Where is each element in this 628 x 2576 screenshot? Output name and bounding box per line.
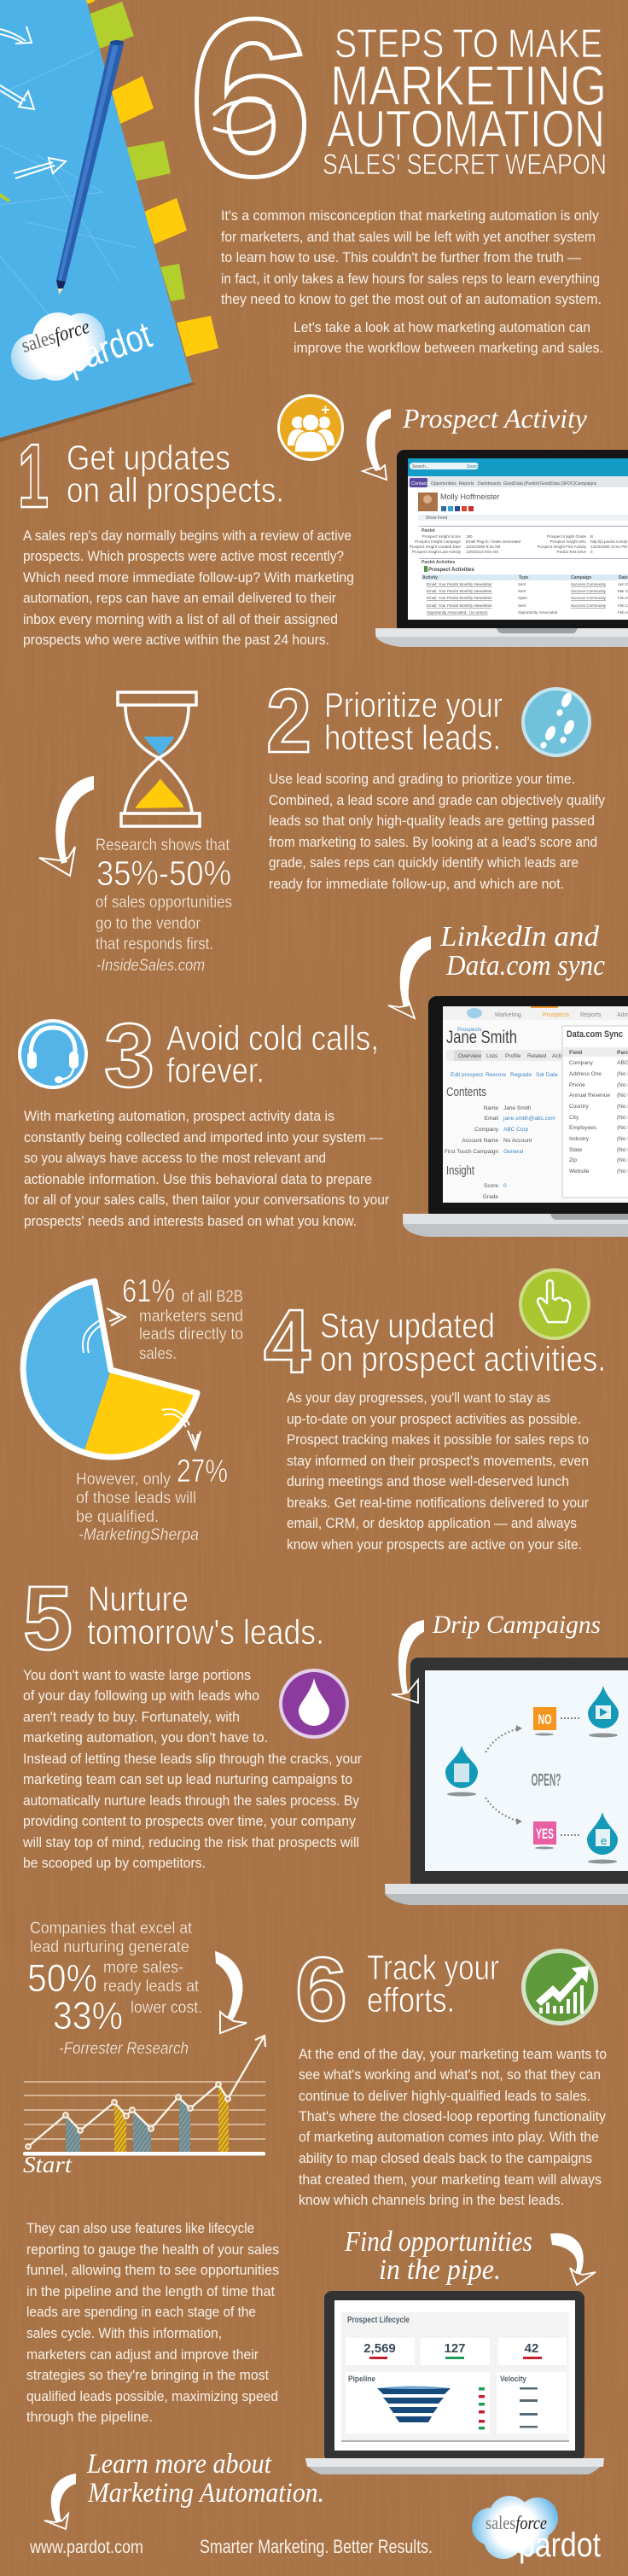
intro text: in fact, it only takes a few hours for sales reps to learn everything: [221, 271, 600, 287]
drip flow: NO: [538, 1711, 551, 1728]
step 5 text: aren't ready to buy. Fortunately, with: [23, 1710, 240, 1725]
lifecycle reporting text: through the pipeline.: [26, 2410, 153, 2425]
laptop 2: data.com sync screen: Overview: [458, 1053, 481, 1059]
laptop 1: prospect activity screen: Pardot: [422, 528, 435, 533]
lifecycle reporting text: funnel, allowing them to see opportunities: [26, 2263, 279, 2278]
research stat callout: that responds first.: [96, 935, 213, 953]
research stat callout: Research shows that: [96, 836, 230, 854]
laptop 4: prospect lifecycle dashboard: Prospect Lifecycle: [347, 2316, 410, 2325]
laptop 1: prospect activity screen: Email: Your Pardot Monthly Newsletter: [427, 603, 492, 608]
laptop 2: data.com sync screen: Website: [569, 1169, 590, 1174]
step 4 text: As your day progresses, you'll want to stay as: [287, 1390, 550, 1406]
27 percent callout: [76, 1454, 228, 1544]
step 1 text: [23, 528, 354, 648]
arrow to research stat: [39, 776, 94, 876]
handwritten label: find opportunities in the pipe: in the pipe.: [379, 2254, 501, 2286]
laptop 1: prospect activity screen: Campaigns: [575, 481, 597, 487]
laptop 2: data.com sync screen: ABC Corp: [503, 1127, 529, 1133]
laptop 1: prospect activity screen: Reports: [459, 481, 474, 487]
velocity list: Velocity: [500, 2375, 526, 2383]
handwritten label: find opportunities in the pipe: Find opportunities: [344, 2226, 532, 2258]
laptop 2: data.com sync screen: Industry: [569, 1136, 590, 1142]
lifecycle reporting text: [26, 2221, 279, 2425]
step 2 text: from marketing to sales. By looking at a lead's score and: [269, 835, 597, 850]
intro text: to learn how to use. This couldn't be further from the truth —: [221, 250, 581, 265]
step 6 text: that created them, your marketing team will always: [299, 2172, 602, 2188]
lifecycle reporting text: They can also use features like lifecycle: [26, 2221, 254, 2236]
step 3 text: prospects' needs and interests based on what you know.: [24, 1214, 357, 1229]
step 5 heading: tomorrow's leads.: [87, 1612, 324, 1652]
step 1 text: prospects who were active within the past 24 hours.: [23, 632, 329, 648]
step 1 text: A sales rep's day normally begins with a review of active: [23, 528, 352, 544]
laptop 2: data.com sync screen: City: [569, 1115, 579, 1121]
laptop 2: data.com sync screen: Field: [569, 1050, 582, 1056]
laptop 2: data.com sync screen: Contents: [446, 1085, 486, 1099]
laptop 1: prospect activity screen: Email: Your Pardot Monthly Newsletter: [427, 582, 492, 586]
step 2 heading: [324, 685, 503, 757]
intro text: [221, 208, 603, 356]
laptop 2: data.com sync screen: Activ: [552, 1053, 565, 1059]
lifecycle reporting text: marketers can adjust and improve their: [26, 2347, 259, 2363]
laptop 1: prospect activity screen: Campaign: [571, 575, 591, 580]
step 5 text: automatically nurture leads through the sales process. By: [23, 1793, 360, 1809]
arrow to laptop 1: [363, 409, 391, 480]
arrow to chart: [215, 1951, 247, 2033]
footer tagline: Smarter Marketing. Better Results.: [200, 2536, 433, 2557]
sticky tabs: [85, 0, 218, 357]
lead nurturing stat callout: -Forrester Research: [59, 2040, 189, 2058]
61 percent callout: [122, 1273, 243, 1363]
laptop 2: data.com sync screen: Profile: [505, 1053, 521, 1059]
laptop 1: prospect activity screen: Pardot Activities: [422, 560, 455, 565]
61 percent callout: leads directly to: [139, 1326, 243, 1343]
icon: droplet: [279, 1669, 349, 1739]
arrow to url: [44, 2474, 76, 2529]
step 4 heading: Stay updated: [320, 1306, 495, 1345]
step 1 numeral: 1: [18, 426, 49, 527]
laptop 1: prospect activity screen: 0: [590, 550, 593, 554]
footer logo: salesforce pardot: [472, 2496, 601, 2564]
icon: pointing hand: [519, 1268, 590, 1340]
laptop 1: prospect activity screen: 12/22/2009 12:01 PM: [590, 545, 627, 549]
61 percent callout: sales.: [139, 1345, 177, 1363]
27 percent callout: be qualified.: [76, 1508, 159, 1526]
step 4 text: stay informed on their prospect's movements, even: [287, 1454, 589, 1469]
laptop 2: data.com sync screen: [403, 996, 628, 1237]
step 1 heading: [67, 438, 284, 510]
27 percent callout: of those leads will: [76, 1489, 196, 1507]
laptop 1: prospect activity screen: GoodData (SFDC): [540, 481, 575, 487]
laptop 2: data.com sync screen: First Touch Campaign: [445, 1149, 498, 1155]
research stat callout: of sales opportunities: [96, 894, 232, 912]
research stat callout: -InsideSales.com: [96, 957, 205, 975]
step 1 text: Which need more immediate follow-up? With marketing: [23, 570, 354, 586]
handwritten label: prospect activity: Prospect Activity: [402, 403, 588, 434]
hatched bars: [66, 2084, 229, 2153]
step 1 heading: Get updates: [67, 438, 230, 477]
handwritten label: linkedin and data.com sync: [439, 921, 605, 982]
line chart: Start: [23, 2152, 73, 2177]
lifecycle stats: 42: [525, 2341, 538, 2356]
laptop 2: data.com sync screen: Jane Smith: [503, 1105, 532, 1111]
lifecycle reporting text: leads are spending in each stage of the: [26, 2305, 256, 2320]
step 6 text: know which channels bring in the best leads.: [299, 2193, 564, 2208]
blue notebook with tabs, pen and logo: [0, 0, 218, 442]
hourglass illustration: [118, 692, 200, 826]
step 3 text: for all of your sales calls, then tailor your conversations to your: [24, 1192, 389, 1208]
lead nurturing stat callout: ready leads at: [103, 1978, 200, 1996]
laptop 1: prospect activity screen: Success Community: [571, 603, 607, 608]
laptop 1: prospect activity screen: Date: [619, 575, 628, 580]
laptop 1: prospect activity screen: Search: [467, 464, 480, 469]
step 3 text: constantly being collected and imported into your system —: [24, 1130, 383, 1145]
pie chart: [22, 1281, 201, 1457]
laptop 1: prospect activity screen: Molly Hoffmeister: [440, 492, 499, 501]
step 1 heading: on all prospects.: [67, 470, 284, 510]
laptop 1: prospect activity screen: Prospect Insight Created Date: [410, 545, 461, 549]
61 percent callout: marketers send: [139, 1308, 243, 1326]
lifecycle reporting text: reporting to gauge the health of your sales: [26, 2242, 279, 2258]
laptop 1: prospect activity screen: Show Feed: [426, 516, 448, 521]
step 6 text: At the end of the day, your marketing team wants to: [299, 2047, 607, 2062]
handwritten call to action: Marketing Automation.: [87, 2478, 324, 2509]
laptop 1: prospect activity screen: Dashboards: [478, 481, 501, 487]
laptop 2: data.com sync screen: Prospects: [543, 1012, 570, 1018]
lifecycle stats: 127: [444, 2341, 466, 2356]
step 4 heading: [320, 1306, 606, 1378]
logo: salesforce pardot: pardot: [61, 314, 157, 382]
step 3 heading: forever.: [166, 1051, 265, 1090]
laptop 2: data.com sync screen: Prospects: [457, 1027, 483, 1033]
handwritten call to action: Learn more about: [86, 2449, 272, 2480]
laptop 2: data.com sync screen: 0: [503, 1183, 507, 1189]
laptop 2: data.com sync screen: No Account: [503, 1138, 532, 1144]
drip flow: e: [601, 1834, 607, 1847]
laptop 1: prospect activity screen: GoodData (Pardot): [503, 481, 540, 487]
step 3 heading: Avoid cold calls,: [166, 1018, 379, 1058]
step 6 heading: Track your: [367, 1948, 499, 1987]
intro text: they need to know to get the most out of an automation system.: [221, 292, 602, 307]
lifecycle stats: 2,569: [363, 2341, 396, 2356]
step 2 text: [269, 772, 606, 892]
lifecycle reporting text: sales cycle. With this information,: [26, 2326, 222, 2341]
pie arrows: [83, 1308, 201, 1449]
step 4 text: [287, 1390, 589, 1553]
laptop 2: data.com sync screen: State: [569, 1147, 583, 1153]
step 4 numeral: 4: [264, 1291, 311, 1392]
lifecycle reporting text: qualified leads possible, maximizing speed: [26, 2389, 278, 2404]
61 percent callout: 61%: [122, 1273, 175, 1309]
research stat callout: go to the vendor: [96, 915, 201, 933]
laptop 2: data.com sync screen: General: [503, 1149, 524, 1155]
laptop 1: prospect activity screen: Success Community: [571, 589, 607, 593]
laptop 1: prospect activity screen: Open: [518, 596, 528, 600]
laptop 1: prospect activity screen: [375, 450, 628, 647]
handwritten label: find opportunities in the pipe: [344, 2226, 532, 2286]
step 2 text: grade, sales reps can quickly identify which leads are: [269, 855, 579, 871]
lead nurturing stat callout: lead nurturing generate: [30, 1938, 189, 1956]
laptop 1: prospect activity screen: Type: [519, 575, 529, 580]
laptop 1: prospect activity screen: Success Community: [571, 582, 607, 586]
laptop 2: data.com sync screen: Related: [527, 1053, 547, 1059]
laptop 2: data.com sync screen: Company: [569, 1060, 594, 1066]
laptop 2: data.com sync screen: Rescore: [486, 1072, 507, 1078]
step 5 text: marketing team can set up lead nurturing campaigns to: [23, 1772, 352, 1787]
laptop 2: data.com sync screen: jane.smith@abc.com: [503, 1116, 555, 1122]
laptop 2: data.com sync screen: Edit prospect: [451, 1072, 483, 1078]
laptop 2: data.com sync screen: Sdr Data: [536, 1072, 558, 1078]
step 5 text: marketing automation, you don't have to.: [23, 1730, 268, 1746]
laptop 1: prospect activity screen: 180: [466, 534, 473, 539]
step 4 text: email, CRM, or desktop application — and always: [287, 1516, 577, 1531]
drip flow: OPEN?: [531, 1771, 561, 1790]
logo: salesforce pardot: salesforce: [19, 316, 92, 358]
laptop 1: prospect activity screen: Opportunity Associated - (no action): [427, 610, 488, 615]
laptop 2: data.com sync screen: Address One: [569, 1071, 602, 1077]
laptop 1: prospect activity screen: 1/25/2013 9:02 AM: [466, 550, 498, 554]
laptop 1: prospect activity screen: Activity: [422, 575, 438, 580]
lifecycle reporting text: in the pipeline and the length of time that: [26, 2284, 275, 2299]
step 1 text: inbox every morning with a list of all of their assigned: [23, 612, 338, 627]
step 6 heading: [367, 1948, 499, 2019]
notebook page: [0, 0, 192, 438]
icon: people: [277, 394, 344, 461]
lead nurturing stat callout: 33%: [53, 1994, 123, 2037]
laptop 1: prospect activity screen: Prospect Insight First Activity: [537, 545, 587, 549]
step 4 text: Prospect tracking makes it possible for sales reps to: [287, 1432, 589, 1448]
step 1 text: prospects. Which prospects were active most recently?: [23, 549, 344, 564]
step 5 text: You don't want to waste large portions: [23, 1668, 251, 1683]
laptop 1: prospect activity screen: 12/22/2009 9:26 AM: [466, 545, 501, 549]
step 5 text: Instead of letting these leads slip through the cracks, your: [23, 1751, 362, 1767]
laptop 2: data.com sync screen: Regrade: [510, 1072, 532, 1078]
intro text: improve the workflow between marketing and sales.: [294, 341, 603, 356]
step 3 text: [24, 1109, 389, 1229]
laptop 2: data.com sync screen: Email: [485, 1116, 499, 1122]
step 5 heading: [87, 1579, 324, 1652]
step 6 numeral: 6: [295, 1939, 347, 2040]
lead nurturing stat callout: more sales-: [103, 1959, 183, 1977]
step 3 numeral: 3: [104, 1005, 154, 1106]
step 5 text: of your day following up with leads who: [23, 1688, 259, 1704]
laptop 1: prospect activity screen: B: [590, 534, 593, 539]
step 3 text: With marketing automation, prospect activity data is: [24, 1109, 334, 1124]
arrow to laptop 4: [550, 2233, 596, 2285]
step 2 heading: Prioritize your: [324, 685, 503, 725]
handwritten call to action: [86, 2449, 324, 2509]
icon: growth chart: [521, 1949, 598, 2025]
step 2 heading: hottest leads.: [324, 718, 501, 757]
laptop 2: data.com sync screen: Score: [484, 1183, 498, 1189]
laptop 1: prospect activity screen: Email: Your Pardot Monthly Newsletter: [427, 589, 492, 593]
laptop 1: prospect activity screen: Success Community: [571, 596, 607, 600]
lead nurturing stat callout: lower cost.: [131, 1999, 202, 2017]
laptop 2: data.com sync screen: Insight: [446, 1163, 475, 1178]
step 5 text: will stay top of mind, reducing the risk that prospects will: [22, 1835, 359, 1850]
laptop 1: prospect activity screen: Pardot Test Drive: [557, 550, 586, 554]
handwritten label: linkedin and data.com sync: Data.com sync: [445, 950, 605, 982]
laptop 2: data.com sync screen: Lists: [486, 1053, 498, 1059]
step 5 text: be scooped up by competitors.: [23, 1856, 206, 1871]
laptop 2: data.com sync screen: Zip: [569, 1157, 577, 1163]
laptop 1: prospect activity screen: Prospect Insight Campaign: [415, 539, 461, 544]
step 1 text: automation, reps can have an email delivered to their: [23, 591, 336, 606]
laptop 2: data.com sync screen: Country: [569, 1104, 590, 1110]
laptop 2: data.com sync screen: Annual Revenue: [569, 1093, 610, 1099]
step 6 heading: efforts.: [367, 1980, 455, 2019]
intro text: It's a common misconception that marketing automation is only: [221, 208, 600, 224]
velocity list: [497, 2372, 567, 2433]
laptop 1: prospect activity screen: Prospect Insight Last Activity: [412, 550, 462, 554]
arrow to laptop 2: [388, 936, 431, 1018]
step 2 numeral: 2: [266, 671, 311, 772]
step 6 text: see what's working and what's not, so that they can: [299, 2067, 601, 2083]
step 3 text: so you always have access to the most relevant and: [24, 1151, 326, 1166]
laptop 1: prospect activity screen: Sent: [518, 589, 526, 593]
laptop 2: data.com sync screen: Grade: [483, 1194, 498, 1200]
laptop 1: prospect activity screen: Email: Your Pardot Monthly Newsletter: [427, 596, 492, 600]
step 2 text: ready for immediate follow-up, and which are not.: [269, 877, 564, 892]
laptop 1: prospect activity screen: Sent: [518, 603, 526, 608]
research stat callout: 35%-50%: [96, 854, 231, 893]
laptop 1: prospect activity screen: Prospect Insight Score: [422, 534, 461, 539]
laptop 2: data.com sync screen: Jane Smith: [446, 1028, 517, 1047]
step 5 text: [22, 1668, 362, 1871]
laptop 1: prospect activity screen: Prospect Insight URL: [550, 539, 586, 544]
laptop 2: data.com sync screen: Marketing: [495, 1012, 521, 1018]
61 percent callout: of all B2B: [182, 1288, 243, 1306]
laptop 1: prospect activity screen: Opportunities: [431, 481, 456, 487]
step 5 text: providing content to prospects over time, your company: [23, 1814, 357, 1829]
title: [323, 20, 607, 181]
sketched arrows on notebook: [0, 26, 66, 178]
step 6 text: of marketing automation comes into play. With the: [299, 2130, 599, 2145]
footer logo: salesforce pardot: salesforce: [486, 2512, 547, 2533]
pipeline funnel: Pipeline: [348, 2375, 375, 2383]
laptop 2: data.com sync screen: Company: [474, 1127, 499, 1133]
lifecycle reporting text: strategies so they're bringing in the most: [26, 2368, 269, 2383]
step 2 text: leads so that only high-quality leads are getting passed: [269, 813, 595, 829]
logo: salesforce pardot: [11, 312, 157, 382]
line chart: [23, 2036, 265, 2177]
handwritten label: drip campaigns: Drip Campaigns: [432, 1611, 601, 1639]
icon: headset: [18, 1019, 88, 1089]
27 percent callout: -MarketingSherpa: [78, 1526, 199, 1544]
step 6 text: ability to map closed deals back to the campaigns: [299, 2151, 592, 2166]
laptop 1: prospect activity screen: Prospect Activities: [428, 568, 474, 573]
laptop 2: data.com sync screen: ABC: [617, 1060, 628, 1066]
step 2 text: Combined, a lead score and grade can objectively qualify: [269, 793, 606, 808]
lead nurturing stat callout: 50%: [27, 1956, 97, 2000]
pen: [56, 40, 124, 294]
27 percent callout: 27%: [177, 1454, 228, 1489]
step 6 text: [299, 2047, 607, 2208]
icon: footprints: [521, 687, 591, 757]
footer url: www.pardot.com: [29, 2538, 143, 2557]
laptop 3: drip campaign diagram: [385, 1658, 628, 1905]
laptop 1: prospect activity screen: Opportunity Associated: [518, 610, 558, 615]
laptop 4: prospect lifecycle dashboard: [305, 2291, 604, 2474]
step 4 text: know when your prospects are active on your site.: [287, 1537, 582, 1553]
laptop 2: data.com sync screen: Name: [484, 1105, 498, 1111]
drip flow: YES: [536, 1826, 554, 1842]
step 4 text: during meetings and those well-deserved lunch: [287, 1474, 569, 1489]
step 3 text: actionable information. Use this behavioral data to prepare: [24, 1172, 372, 1187]
laptop 1: prospect activity screen: Sent: [518, 582, 526, 586]
step 2 text: Use lead scoring and grading to prioritize your time.: [269, 772, 575, 787]
drip flow: [445, 1686, 619, 1864]
step 6 text: That's where the closed-loop reporting functionality: [299, 2109, 607, 2124]
footer logo: salesforce pardot: pardot: [519, 2526, 601, 2564]
laptop 2: data.com sync screen: Phone: [569, 1082, 585, 1088]
step 5 heading: Nurture: [88, 1579, 189, 1618]
lead nurturing stat callout: [27, 1920, 202, 2058]
laptop 1: prospect activity screen: Prospect Insight Grade: [547, 534, 586, 539]
intro text: for marketers, and that sales will be left with yet another system: [221, 230, 596, 245]
lead nurturing stat callout: Companies that excel at: [30, 1920, 193, 1938]
step 6 text: continue to deliver highly-qualified leads to sales.: [299, 2089, 590, 2104]
step 3 heading: [166, 1018, 379, 1090]
laptop 1: prospect activity screen: Contacts: [411, 481, 430, 487]
laptop 1: prospect activity screen: Search...: [412, 464, 429, 469]
lifecycle stats: [346, 2338, 567, 2365]
step 4 text: up-to-date on your prospect activities as possible.: [287, 1412, 581, 1427]
laptop 2: data.com sync screen: Employees: [569, 1125, 597, 1131]
laptop 2: data.com sync screen: Reports: [580, 1012, 602, 1018]
step 4 text: breaks. Get real-time notifications delivered to your: [287, 1495, 589, 1511]
laptop 1: prospect activity screen: Email Plug-in / Sales Generated: [466, 539, 521, 544]
intro text: Let's take a look at how marketing automation can: [294, 320, 590, 335]
handwritten label: linkedin and data.com sync: LinkedIn and: [439, 921, 600, 953]
research stat callout: [96, 836, 232, 975]
pipeline funnel: [346, 2372, 490, 2433]
27 percent callout: However, only: [76, 1471, 171, 1489]
arrow to laptop 3: [392, 1620, 424, 1703]
laptop 2: data.com sync screen: Account Name: [462, 1138, 498, 1144]
step 5 numeral: 5: [23, 1568, 73, 1669]
